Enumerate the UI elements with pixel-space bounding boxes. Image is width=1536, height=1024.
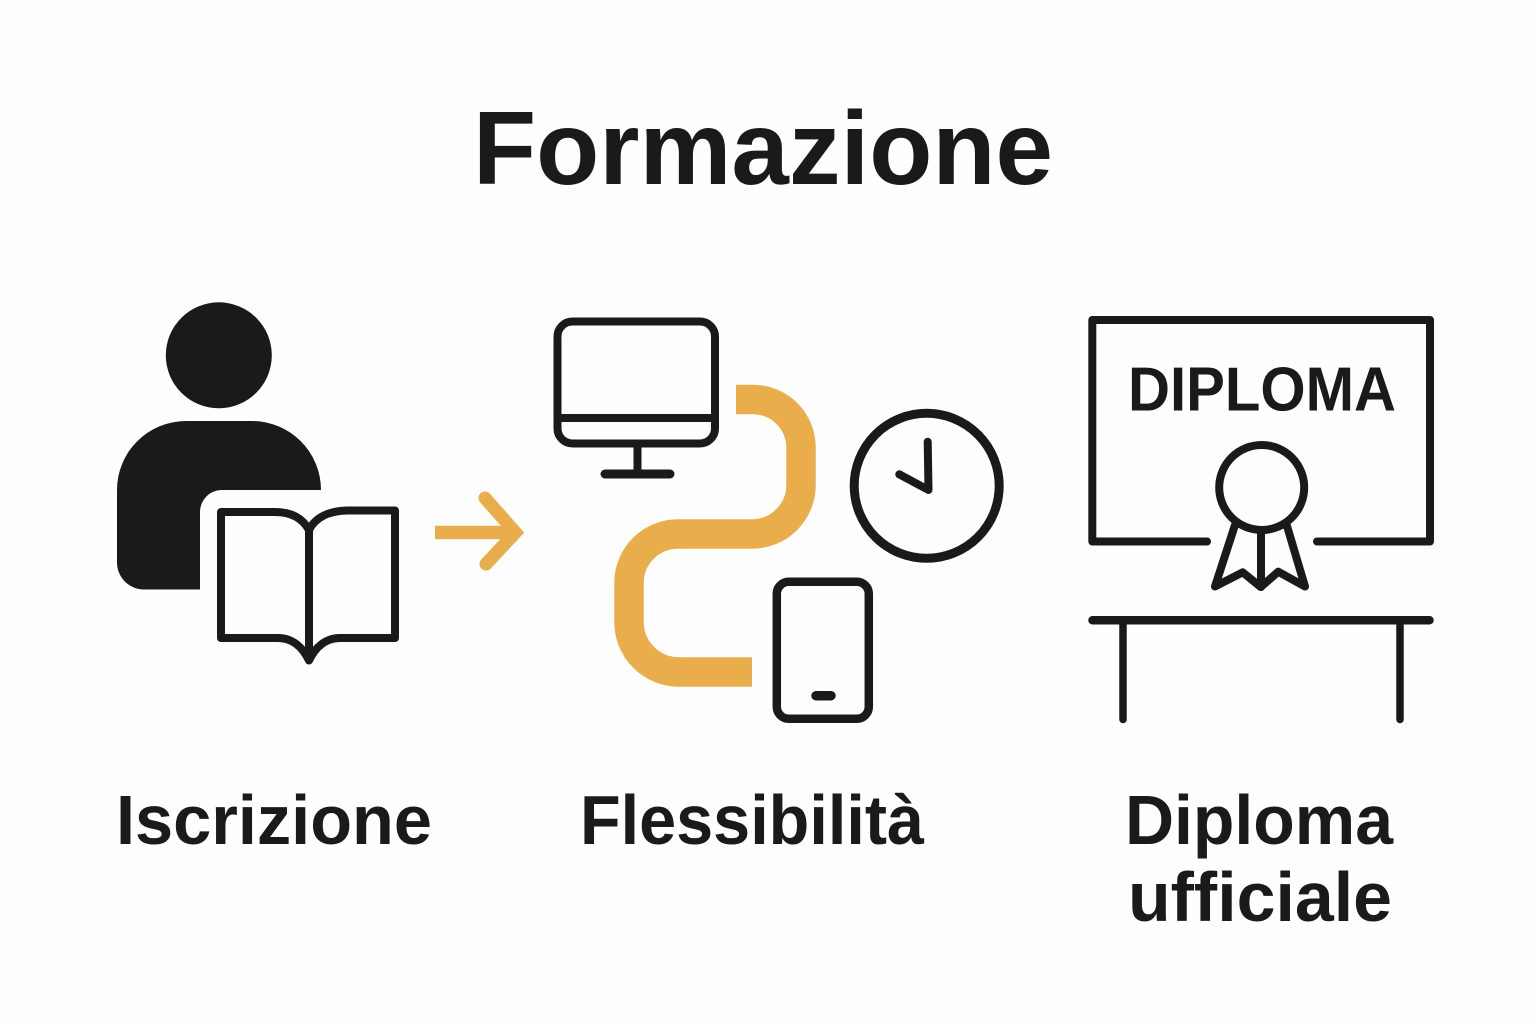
label: Diploma ufficiale: Diploma: [1125, 781, 1394, 859]
label: Diploma ufficiale: [1125, 781, 1394, 936]
person head: [166, 302, 272, 408]
table: [1092, 620, 1430, 720]
icon: smartphone: [777, 582, 869, 719]
rosette: [1215, 445, 1305, 587]
arrow: enrolment to flexibility: [435, 498, 516, 564]
board frame: [1092, 320, 1430, 542]
label: Diploma ufficiale: ufficiale: [1128, 858, 1392, 936]
icon: diploma board on table: [1092, 320, 1430, 720]
label: Flessibilità: Flessibilità: [580, 781, 925, 859]
winding path: [629, 400, 801, 672]
person body: [117, 421, 321, 590]
board label: DIPLOMA: [1128, 356, 1396, 424]
icon: person reading a book: [117, 302, 395, 660]
open book: [221, 510, 395, 660]
title: Formazione: [473, 91, 1053, 207]
icon: clock: [854, 413, 999, 558]
label: Iscrizione: Iscrizione: [116, 781, 432, 859]
icon: desktop monitor: [558, 322, 715, 474]
